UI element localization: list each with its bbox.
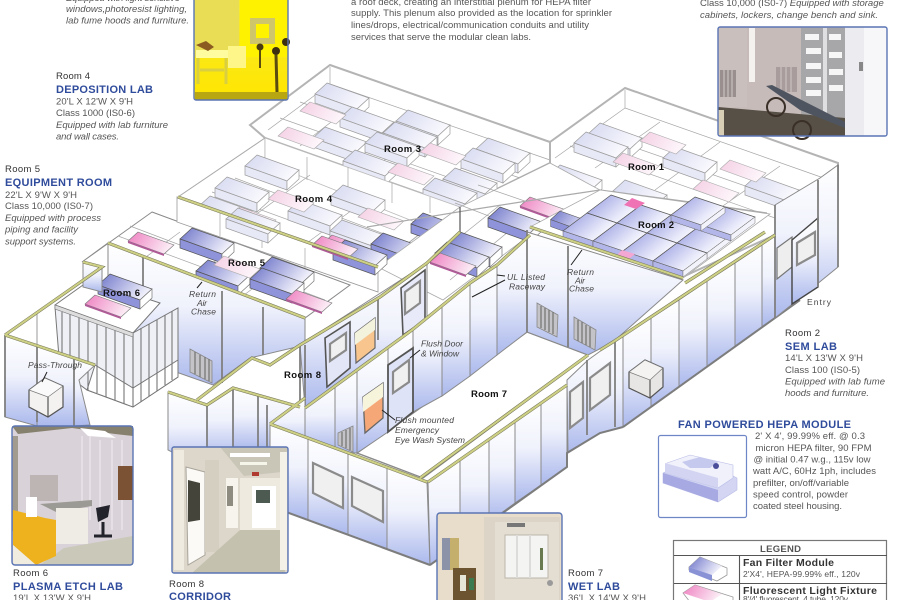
room labels on plan: Room 6 [103,288,140,299]
legend: fluorescent light fixture: Fluorescent Light Fixture [743,585,877,597]
callouts on plan: & Window [421,348,460,358]
wall: room 8 back with door and eye wash [300,263,427,410]
roof: room 5 [82,197,387,318]
icon: return air vent room 5 [190,349,212,383]
hepa module description [752,431,876,512]
text: wet lab room 7 [568,568,646,600]
callouts on plan: UL Listed [507,272,545,282]
roof: room 2 fan filter tiles [530,190,770,278]
callouts on plan: Flush Door [421,338,464,348]
text: gowning room [700,0,884,21]
text: plenum description: supply. This plenum also provided as the location for sprinkler [351,8,612,19]
callouts on plan: Chase [191,306,216,316]
text: plenum description [351,0,612,43]
panel: fan powered hepa module [658,419,876,518]
callouts on plan: Air [196,298,208,308]
room labels on plan: Room 1 [628,162,665,173]
callouts on plan: Eye Wash System [395,435,465,445]
text: deposition lab room 4: and wall cases. [56,132,119,142]
room 6 lid [55,274,160,337]
text: room 3 lab top note [66,0,189,26]
wall: entry with door [775,165,838,318]
wall: corridor stubs [168,388,305,470]
photo: gowning room [718,27,887,139]
wall: room 7 back left [305,235,530,453]
text: corridor room 8 [169,579,231,600]
text: sem lab room 2: SEM LAB [785,341,837,353]
text: equipment room room 5: 22'L X 9'W X 9'H [5,190,77,201]
door: flush door and window [388,348,413,432]
roof: corridor plenum and side modules [367,163,767,300]
text: equipment room room 5: Room 5 [5,164,40,175]
text: deposition lab room 4: Equipped with lab furniture [56,120,168,131]
text: equipment room room 5: Class 10,000 (IS0-7) [5,201,93,212]
text: gowning room: cabinets, lockers, change bench and sink. [700,10,878,21]
text: equipment room room 5: support systems. [5,236,76,248]
callouts on plan: Flush mounted [395,415,454,425]
text: equipment room room 5 [4,164,112,248]
text: room 3 lab top note: windows,photoresist lighting, [66,4,187,15]
hepa module description: micron HEPA filter, 90 FPM [756,443,872,454]
icon: vent one [537,303,558,337]
roof: room 1 [530,88,838,278]
room labels on plan: Room 7 [471,389,507,400]
text: deposition lab room 4: Room 4 [56,71,90,82]
window: return wall two [590,363,610,410]
callouts on plan: Return [189,289,216,299]
legend: fan filter module [689,557,861,581]
hepa module image box [658,436,746,518]
text: plenum description: services that serve the modular clean labs. [351,32,531,43]
hepa module description: 2' X 4', 99.99% eff. @ 0.3 [755,431,865,442]
panel: legend [674,540,887,600]
hepa module description: watt A/C, 60Hz 1ph, includes [752,466,876,477]
window two [352,477,383,522]
callouts on plan: Air [574,276,586,286]
legend heading: LEGEND [760,544,801,555]
legend: fan filter module: 2'X4', HEPA-99.99% eff., 120v [743,569,861,579]
room labels on plan: Room 5 [228,258,266,269]
icon: vent two [574,317,596,350]
roof: room 3 [250,65,550,213]
text: room 3 lab top note: lab fume hoods and furniture. [66,16,189,26]
callouts on plan: Emergency [395,425,440,435]
callouts on plan: Chase [569,284,594,294]
text: sem lab room 2: hoods and furniture. [785,388,869,399]
callouts on plan [28,267,832,445]
text: equipment room room 5: Equipped with process [5,213,101,224]
text: sem lab room 2: Room 2 [785,328,820,339]
hepa module description: speed control, powder [753,490,848,500]
icon: pass-through box [29,378,63,417]
photo: wet lab [437,513,562,600]
text: deposition lab room 4: DEPOSITION LAB [56,84,153,96]
raceways [5,197,775,482]
hepa module description: coated steel housing. [753,501,842,512]
room labels on plan [103,144,674,400]
text: plasma etch lab room 6: Room 6 [13,568,48,579]
legend: fluorescent light fixture [683,585,877,600]
door: entry [792,218,818,304]
wall: room 5 front [108,243,305,385]
text: sem lab room 2 [785,328,885,399]
eye wash box: room 8 [355,318,375,363]
roof: room 4 [178,138,465,268]
text: deposition lab room 4: 20'L X 12'W X 9'H [56,96,133,108]
hepa module description: prefilter, on/off/variable [753,478,849,489]
window: return wall one [570,382,583,428]
callouts on plan: Entry [807,297,832,307]
wall: room 7 front right [428,335,623,565]
callouts on plan: Pass-Through [28,360,82,370]
text: sem lab room 2: Equipped with lab fume [785,376,885,388]
fan box on wall [629,360,663,398]
callouts on plan: Return [567,267,594,277]
photo: plasma etch lab [12,426,133,565]
wall: room 6 left exterior [5,262,102,426]
window: entry side [777,237,792,279]
window one [313,463,343,508]
text: deposition lab room 4: Class 1000 (IS0-6) [56,108,135,119]
photo: corridor [172,447,288,573]
hepa module description: @ initial 0.47 w.g., 115v low [754,454,871,466]
room 6 softwall enclosure [55,274,178,407]
text: sem lab room 2: Class 100 (IS0-5) [785,365,860,376]
photo: yellow photoresist lab [194,0,290,100]
callout arrows [42,250,582,420]
text: equipment room room 5: EQUIPMENT ROOM [5,177,112,189]
room labels on plan: Room 8 [284,370,321,381]
wall: room 7 back right with vents [527,230,683,355]
eye wash box: room 7 [363,383,383,433]
room labels on plan: Room 2 [638,220,674,231]
door: upper corridor [401,270,425,335]
text: deposition lab room 4 [56,71,168,142]
text: wet lab room 7: Room 7 [568,568,603,579]
room labels on plan: Room 3 [384,144,421,155]
floor: room 7 [357,332,588,478]
text: sem lab room 2: 14'L X 13'W X 9'H [785,353,863,364]
text: corridor room 8: Room 8 [169,579,204,590]
wall: room 7 front left with windows [270,424,430,565]
room labels on plan: Room 4 [295,194,333,205]
wall: right exterior [623,235,800,427]
text: equipment room room 5: piping and facility [4,224,79,236]
text: plasma etch lab room 6: PLASMA ETCH LAB [13,581,123,593]
text: plasma etch lab room 6 [13,568,123,600]
heading: hepa module: FAN POWERED HEPA MODULE [678,419,851,431]
text: plenum description: lines/drops, electrical/communication conduits and utility [351,20,589,31]
callouts on plan: Raceway [509,282,546,292]
door: room 8 [325,322,350,387]
text: wet lab room 7: WET LAB [568,581,620,593]
legend: fan filter module: Fan Filter Module [743,557,834,569]
icon: vent room 7 [338,426,353,452]
